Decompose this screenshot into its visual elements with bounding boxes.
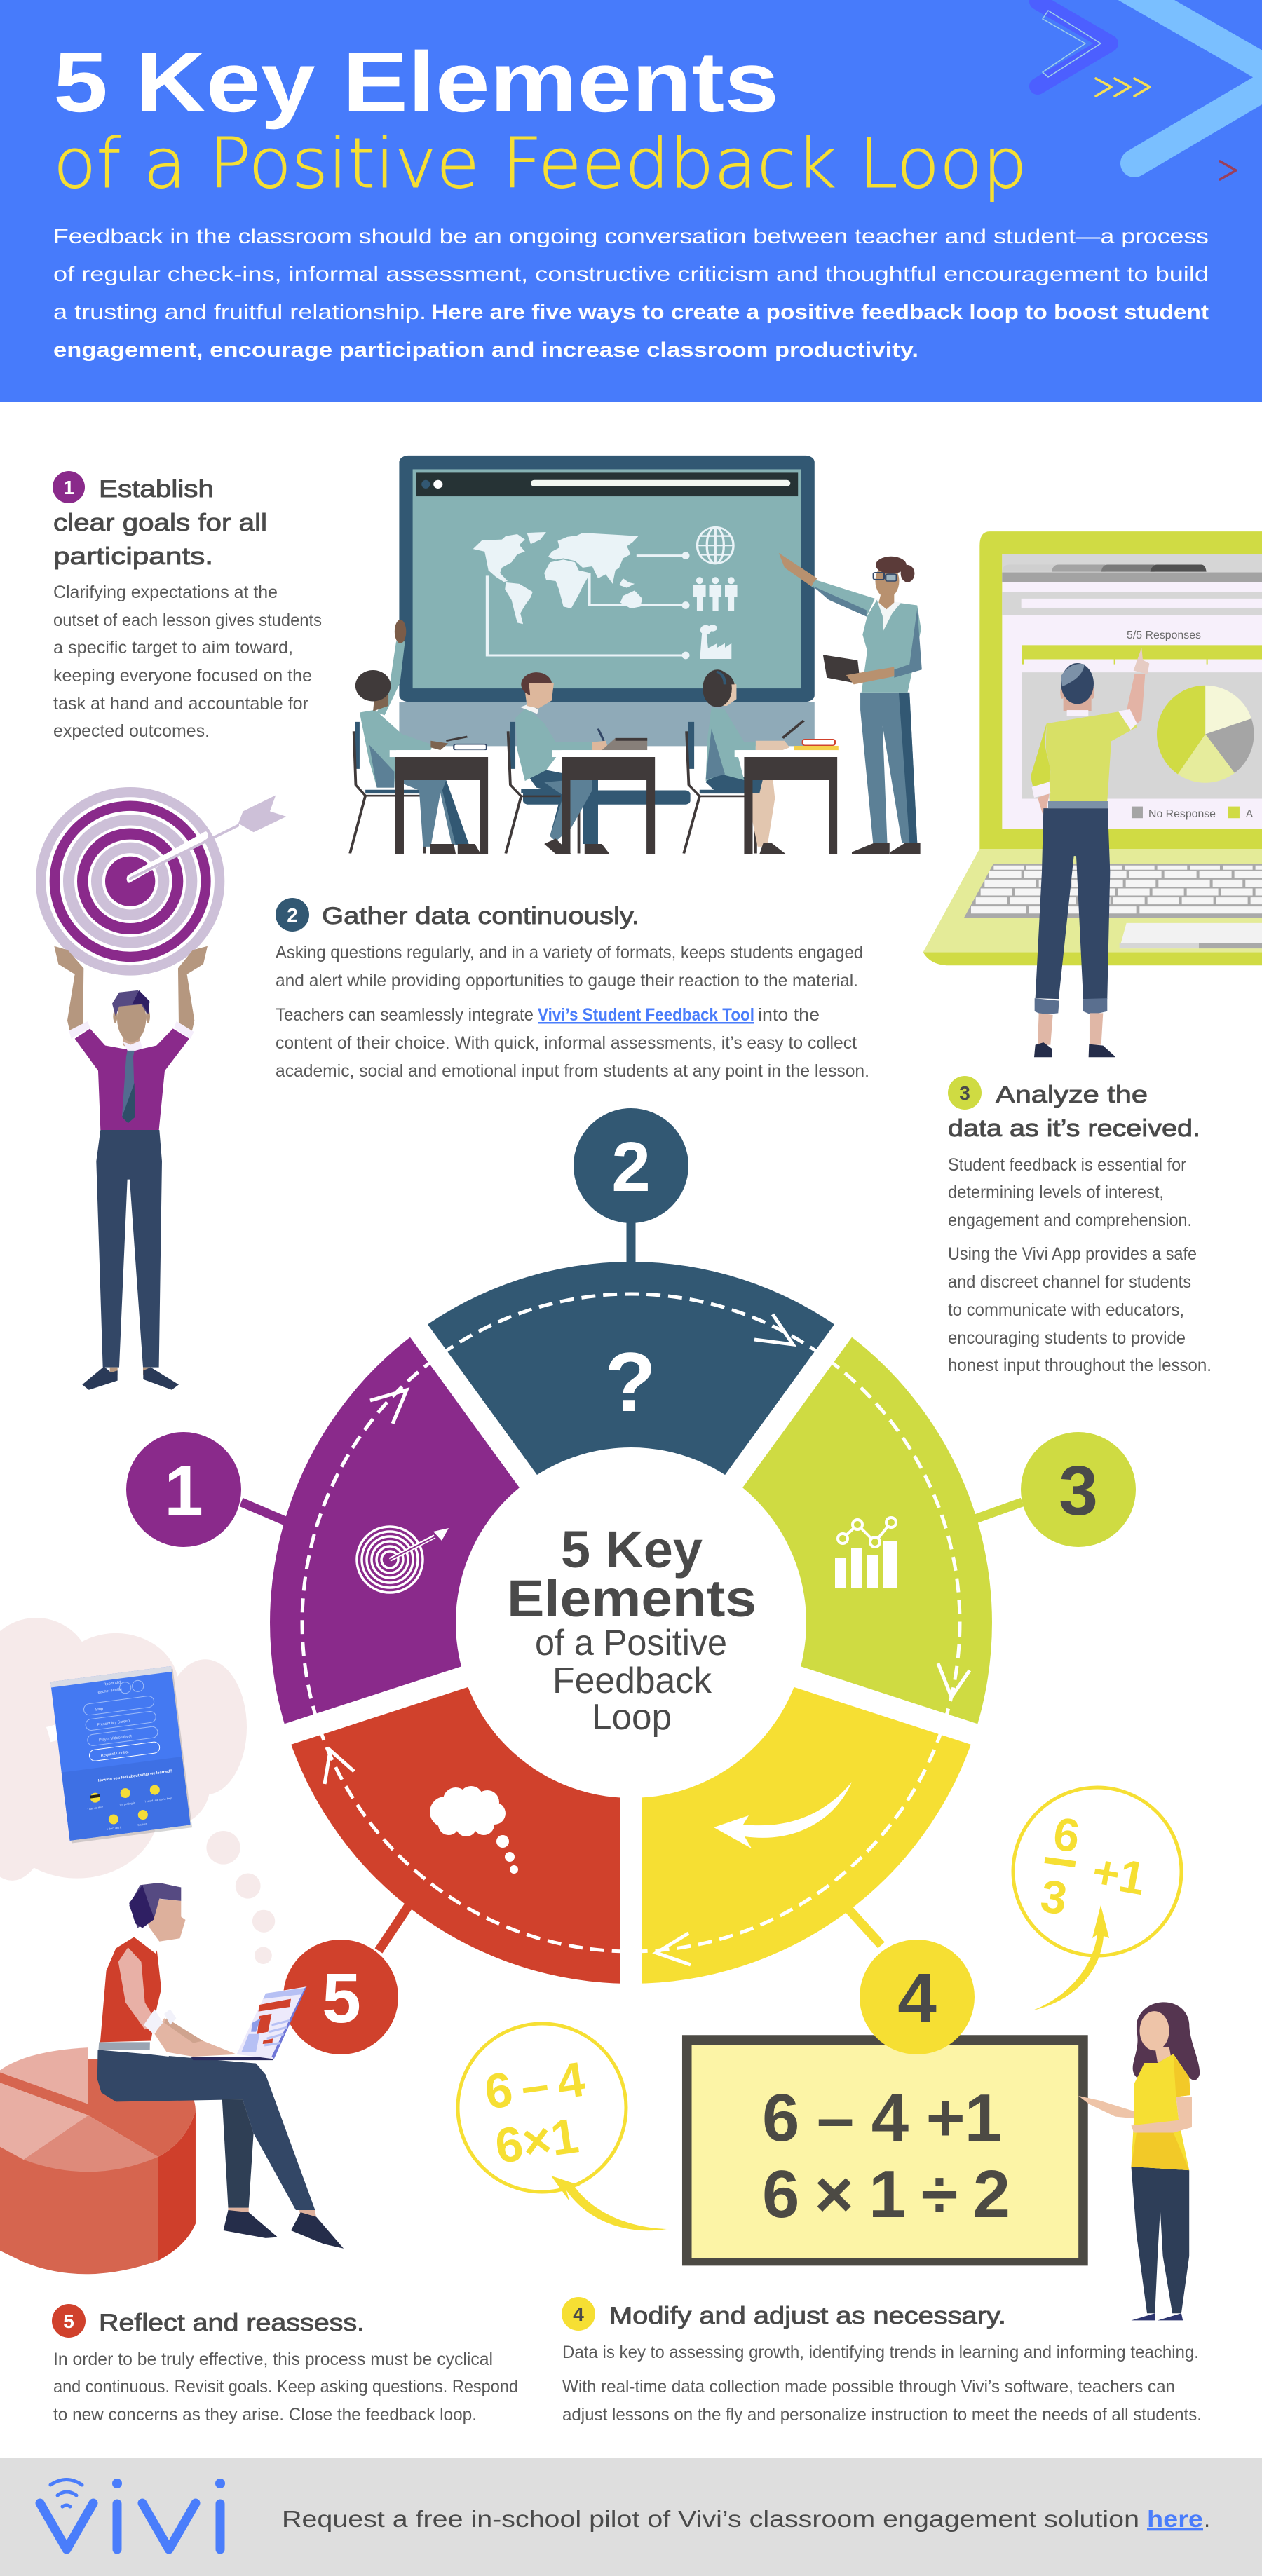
bubble: equations: 6–4 <box>481 2052 588 2120</box>
call to action: Request a free in-school pilot of Vivi’s classroom engagement solution <box>282 2506 1139 2532</box>
section 2 text: Gather data continuously. <box>322 903 639 929</box>
section 2 text: content of their choice. With quick, informal assessments, it’s easy to collect <box>276 1033 857 1053</box>
figure <box>97 1883 344 2249</box>
section 1 text: Establish <box>99 476 214 503</box>
section 5 text: and continuous. Revisit goals. Keep asking questions. Respond <box>53 2377 518 2397</box>
title <box>53 34 1027 204</box>
arrow <box>129 795 286 879</box>
icon: factory <box>700 625 731 659</box>
figure: man pointing at screen <box>1031 648 1149 1057</box>
illustration: thought cloud with app <box>0 1618 275 1964</box>
section 3 text: and discreet channel for students <box>948 1272 1191 1292</box>
icon: target <box>357 1527 449 1593</box>
center title: of a Positive <box>535 1623 727 1663</box>
call to action: . <box>1204 2506 1210 2532</box>
app screenshot: I don't get it <box>107 1825 122 1831</box>
segment: red <box>287 1623 631 1984</box>
intro text: engagement, encourage participation and increase classroom productivity. <box>53 339 918 362</box>
icon: thought cloud <box>430 1786 518 1874</box>
logo: Vivi <box>40 2479 225 2549</box>
intro text: Here are five ways to create a positive feedback loop to boost student <box>431 301 1209 324</box>
figure: student 3 <box>684 669 839 854</box>
section 1 text <box>53 471 322 741</box>
section 3 text: engagement and comprehension. <box>948 1211 1192 1230</box>
section 2 text: and alert while providing opportunities to gauge their reaction to the material. <box>276 971 858 990</box>
app screenshot: How do you feel about what we learned? <box>98 1769 173 1783</box>
intro text: Feedback in the classroom should be an ongoing conversation between teacher and student—a process <box>53 225 1209 248</box>
section 5 text: In order to be truly effective, this process must be cyclical <box>53 2350 493 2369</box>
bubble: equations: 6×1 <box>491 2108 582 2174</box>
bubble: fraction: 6 <box>1050 1807 1083 1862</box>
badge 4 <box>562 2297 595 2331</box>
app screenshot: Present My Screen <box>97 1719 130 1727</box>
app screenshot: Teacher Terrific <box>96 1687 123 1695</box>
section 3 text: honest input throughout the lesson. <box>948 1356 1212 1375</box>
laptop <box>923 531 1262 965</box>
number 3 <box>1021 1432 1136 1547</box>
center title: 5 Key <box>561 1520 703 1579</box>
number 5: 5 <box>322 1959 361 2038</box>
section 5 text: to new concerns as they arise. Close the feedback loop. <box>53 2405 477 2425</box>
bench <box>523 791 691 805</box>
badge 2 <box>276 898 309 932</box>
target <box>36 787 224 976</box>
section 1 text: task at hand and accountable for <box>53 694 308 714</box>
section 1 text: a specific target to aim toward, <box>53 638 293 657</box>
section 3 text <box>948 1076 1212 1375</box>
icon: curved arrow <box>714 1782 852 1848</box>
section 1 text: clear goals for all <box>53 510 267 536</box>
desks <box>390 750 839 854</box>
section 2 text <box>276 898 869 1081</box>
badge 5: 5 <box>63 2310 74 2332</box>
number 5 <box>283 1940 398 2054</box>
arrow: to fraction bubble <box>1033 1905 1109 2010</box>
section 1 text: participants. <box>53 543 213 570</box>
chart labels: No Response <box>1148 808 1216 820</box>
section 4 text: Data is key to assessing growth, identifying trends in learning and informing teaching. <box>562 2343 1199 2362</box>
intro text: of regular check-ins, informal assessment, constructive criticism and thoughtful encouragement to build <box>53 263 1209 286</box>
illustration: chalkboard and teacher <box>682 1940 1200 2320</box>
monitor <box>399 456 815 746</box>
badge 5 <box>52 2304 86 2338</box>
decorative chevrons <box>1038 0 1262 179</box>
section 3 text: Student feedback is essential for <box>948 1155 1186 1175</box>
section 3 text: data as it’s received. <box>948 1115 1200 1142</box>
cloud <box>0 1618 275 1964</box>
chart labels: 5/5 Responses <box>1127 629 1201 641</box>
number 1 <box>126 1432 241 1547</box>
section 2 text: Asking questions regularly, and in a variety of formats, keeps students engaged <box>276 943 863 962</box>
section 3 text: determining levels of interest, <box>948 1183 1164 1202</box>
intro text <box>53 225 1209 362</box>
app screenshot: Room 401 <box>103 1680 121 1687</box>
section 3 text: encouraging students to provide <box>948 1328 1186 1348</box>
chalkboard: 6 × 1 ÷ 2 <box>762 2157 1010 2232</box>
world map <box>473 532 690 659</box>
section 1 text: keeping everyone focused on the <box>53 666 312 686</box>
intro text: a trusting and fruitful relationship. <box>53 301 426 324</box>
flow arrowheads <box>325 1314 970 1965</box>
section 5 text <box>52 2304 518 2425</box>
app screenshot: Play a Video Direct <box>99 1734 133 1743</box>
section 2 text: into the <box>758 1005 820 1025</box>
figure: teacher <box>779 553 922 854</box>
3D pie chart <box>0 2047 196 2274</box>
section 4 text: adjust lessons on the fly and personalize instruction to meet the needs of all students. <box>562 2405 1202 2425</box>
illustration: man on pie chart <box>0 1883 344 2274</box>
app screenshot: Stop <box>95 1707 103 1712</box>
segment: yellow <box>631 1623 975 1984</box>
center title: Feedback <box>552 1661 712 1701</box>
number 1: 1 <box>164 1452 203 1530</box>
chart labels: A <box>1246 808 1253 820</box>
numbered circles <box>126 1108 1136 2054</box>
feedback wheel <box>270 1262 992 2001</box>
badge 2: 2 <box>287 904 298 926</box>
icon: people <box>693 577 738 611</box>
badge 4: 4 <box>573 2303 584 2325</box>
icon: question mark: ? <box>604 1335 656 1429</box>
title: of a Positive Feedback Loop <box>53 124 1027 204</box>
segment: lime <box>631 1330 992 1734</box>
section 2 text: Teachers can seamlessly integrate <box>276 1005 534 1025</box>
illustration: classroom <box>350 456 922 854</box>
panel: footer <box>0 2458 1262 2576</box>
icon: bar chart <box>835 1518 897 1588</box>
badge 1 <box>53 471 85 503</box>
number 2: 2 <box>611 1128 651 1206</box>
illustration: laptop with data <box>923 531 1262 965</box>
chalkboard: 6 – 4 +1 <box>762 2080 1002 2155</box>
number 4 <box>860 1940 975 2054</box>
legend swatches <box>1132 807 1240 818</box>
bubble: fraction <box>1013 1787 1181 1956</box>
figure: woman teacher <box>1078 2002 1200 2320</box>
chart labels <box>1127 629 1253 820</box>
app screenshot: I could use some help <box>144 1796 172 1804</box>
bubble: fraction: 3 <box>1038 1869 1071 1924</box>
section 4 text: Modify and adjust as necessary. <box>609 2303 1006 2329</box>
center circle <box>456 1447 806 1798</box>
bubble: equations <box>458 2024 626 2192</box>
badge 3 <box>948 1076 982 1110</box>
section 4 text <box>562 2297 1202 2425</box>
laptop on lap <box>191 1986 306 2060</box>
section 4 text: With real-time data collection made possible through Vivi’s software, teachers can <box>562 2377 1175 2397</box>
section 2 text: Vivi’s Student Feedback Tool <box>538 1005 754 1025</box>
center title <box>507 1520 756 1738</box>
panel: header <box>0 0 1262 402</box>
figure <box>54 946 208 1390</box>
app screenshot: I can do this! <box>87 1805 103 1811</box>
center title: Elements <box>507 1569 756 1628</box>
segment: blue <box>419 1262 843 1623</box>
title: 5 Key Elements <box>53 34 779 130</box>
section 3 text: Using the Vivi App provides a safe <box>948 1244 1197 1264</box>
app screenshot: Request Control <box>100 1750 129 1758</box>
section 3 text: to communicate with educators, <box>948 1300 1184 1320</box>
section 1 text: outset of each lesson gives students <box>53 611 322 630</box>
chalkboard <box>682 2035 1088 2265</box>
bubble: fraction: +1 <box>1089 1844 1149 1904</box>
section 1 text: expected outcomes. <box>53 721 210 741</box>
illustration: man holding target <box>36 787 286 1390</box>
pie chart on screen <box>1157 686 1254 783</box>
segment: purple <box>270 1330 631 1734</box>
figure: student 1 <box>350 620 487 854</box>
figure: student 2 <box>506 672 647 854</box>
app screenshot: I'm lost <box>137 1822 147 1827</box>
section 3 text: Analyze the <box>996 1082 1148 1108</box>
section 5 text: Reflect and reassess. <box>99 2310 365 2336</box>
number 4: 4 <box>897 1959 937 2038</box>
call to action: here <box>1147 2506 1203 2532</box>
section 1 text: Clarifying expectations at the <box>53 582 278 602</box>
app screenshot: I'm getting it <box>119 1801 135 1806</box>
icon: globe <box>697 527 733 564</box>
app screenshot <box>50 1666 192 1844</box>
section 2 text: academic, social and emotional input from students at any point in the lesson. <box>276 1061 869 1081</box>
badge 1: 1 <box>63 477 74 498</box>
center title: Loop <box>592 1697 672 1738</box>
arrow: to equation bubble <box>551 2176 667 2230</box>
number 3: 3 <box>1059 1452 1098 1530</box>
badge 3: 3 <box>959 1082 970 1104</box>
number 2 <box>574 1108 688 1223</box>
connectors <box>241 1222 1022 1951</box>
